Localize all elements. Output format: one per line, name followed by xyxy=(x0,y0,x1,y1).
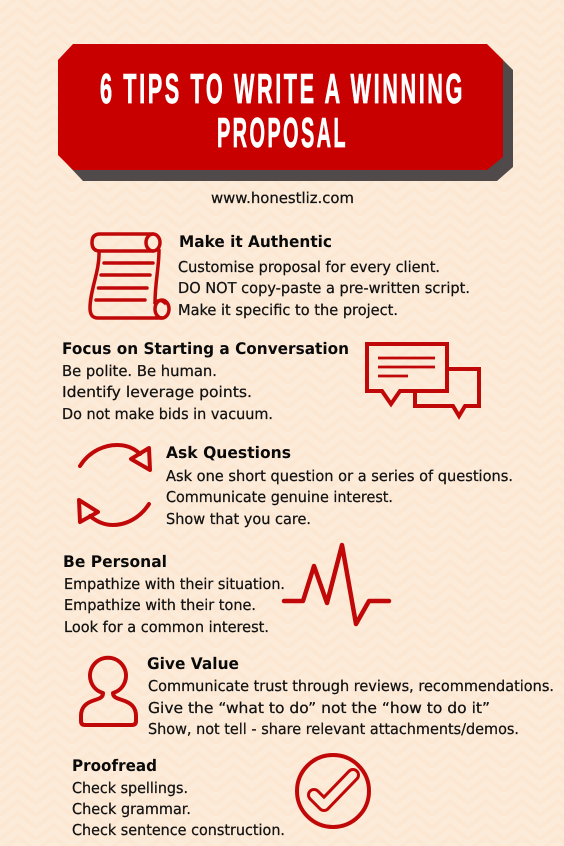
text: focus on starting a conversation: Identify leverage points. xyxy=(62,383,252,401)
icon: chat bubbles xyxy=(367,344,479,416)
text: ask questions: Show that you care. xyxy=(166,510,311,528)
icon: person xyxy=(81,658,136,725)
text: proofread xyxy=(72,756,285,839)
text: focus on starting a conversation: Be polite. Be human. xyxy=(62,362,217,380)
icon: pulse line xyxy=(284,545,389,624)
text: be personal: Empathize with their situation. xyxy=(64,575,285,593)
tip 1: make it authentic xyxy=(90,232,470,319)
text: focus on starting a conversation: Do not make bids in vacuum. xyxy=(62,405,273,423)
text: proofread: Check spellings. xyxy=(72,779,188,797)
tip 3: ask questions xyxy=(79,443,513,528)
text: make it authentic: DO NOT copy-paste a pre-written script. xyxy=(178,279,470,297)
text: make it authentic xyxy=(178,232,470,319)
text: be personal: Empathize with their tone. xyxy=(64,596,256,614)
text: give value: Give the “what to do” not the “how to do it” xyxy=(148,699,490,717)
icon: check mark circle xyxy=(297,755,369,827)
tip 6: proofread xyxy=(72,755,369,839)
icon: cycle arrows xyxy=(79,445,150,525)
text: ask questions: Ask Questions xyxy=(166,443,291,462)
text: focus on starting a conversation xyxy=(62,339,349,423)
text: ask questions: Communicate genuine interest. xyxy=(166,488,393,506)
title banner xyxy=(58,44,513,181)
text: be personal xyxy=(63,552,285,636)
text: give value: Communicate trust through reviews, recommendations. xyxy=(148,677,554,695)
text: give value: Show, not tell - share relevant attachments/demos. xyxy=(148,720,519,738)
tip 4: be personal xyxy=(63,545,389,636)
website url: www.honestliz.com xyxy=(211,189,354,207)
text: focus on starting a conversation: Focus on Starting a Conversation xyxy=(62,339,349,358)
text: proofread: Check sentence construction. xyxy=(72,821,285,839)
title: PROPOSAL xyxy=(217,109,348,156)
text: proofread: Check grammar. xyxy=(72,800,191,818)
text: be personal: Be Personal xyxy=(63,552,167,571)
tip 2: focus on starting a conversation xyxy=(62,339,479,423)
text: ask questions: Ask one short question or a series of questions. xyxy=(166,467,513,485)
text: make it authentic: Customise proposal for every client. xyxy=(178,258,440,276)
text: make it authentic: Make it specific to the project. xyxy=(178,301,398,319)
text: make it authentic: Make it Authentic xyxy=(179,232,332,251)
icon: scroll xyxy=(90,234,169,318)
text: give value: Give Value xyxy=(147,654,239,673)
text: proofread: Proofread xyxy=(72,756,157,775)
text: give value xyxy=(147,654,554,738)
text: ask questions xyxy=(166,443,513,528)
text: be personal: Look for a common interest. xyxy=(64,618,269,636)
tip 5: give value xyxy=(81,654,554,738)
title xyxy=(100,65,465,156)
